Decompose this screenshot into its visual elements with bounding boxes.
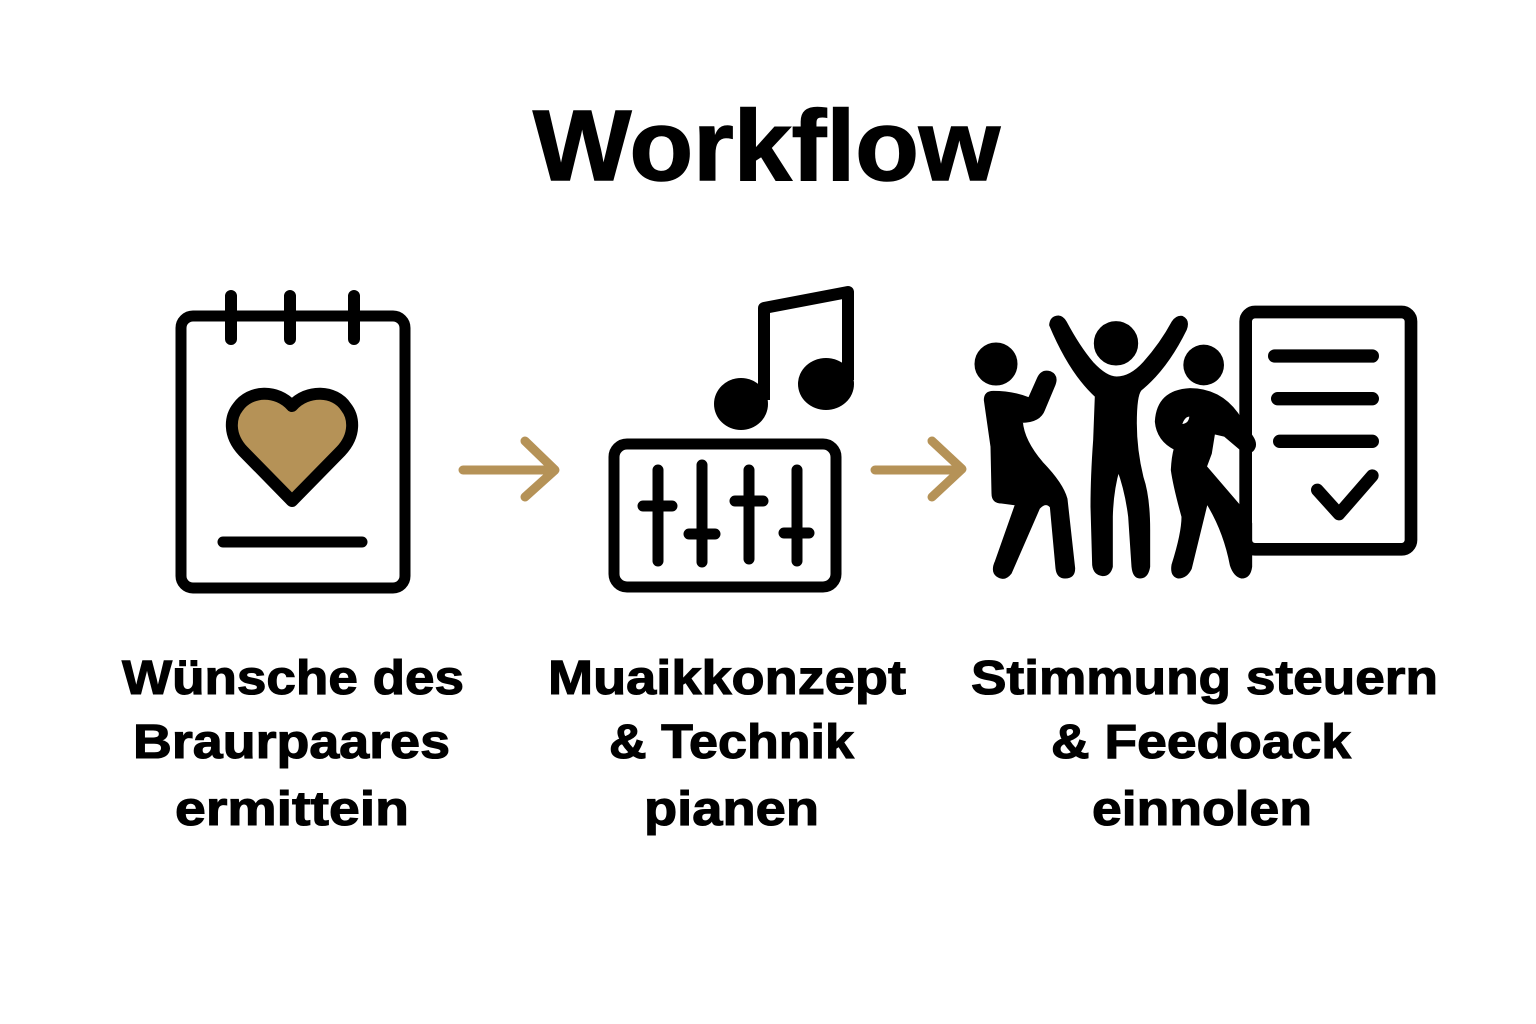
label: step 3 bbox=[971, 652, 1438, 836]
label: step 3: einnolen bbox=[1092, 783, 1312, 836]
icon: music note and mixer bbox=[614, 292, 854, 587]
arrow 1 bbox=[463, 441, 555, 497]
label: step 1: Braurpaares bbox=[133, 716, 450, 769]
icon: person right bbox=[1156, 345, 1254, 577]
icon: dancing people and checklist bbox=[976, 312, 1411, 577]
icon: mixer bbox=[614, 444, 836, 587]
label: step 1: Wünsche des bbox=[122, 652, 464, 705]
icon: music note bbox=[714, 292, 854, 430]
label: step 2: Muaikkonzept bbox=[548, 652, 906, 705]
label: step 1: ermittein bbox=[175, 783, 409, 836]
icon: person middle bbox=[1051, 317, 1186, 577]
label: step 3: Stimmung steuern bbox=[971, 652, 1438, 705]
icon: person left bbox=[976, 344, 1074, 577]
title: Workflow bbox=[533, 90, 1000, 202]
label: step 2: & Technik bbox=[609, 716, 854, 769]
arrow 2 bbox=[875, 441, 962, 497]
icon: notepad with heart bbox=[181, 296, 405, 588]
label: step 2: pianen bbox=[644, 783, 819, 836]
label: step 1 bbox=[122, 652, 464, 836]
icon: checklist bbox=[1246, 312, 1411, 549]
label: step 3: & Feedoack bbox=[1051, 716, 1351, 769]
label: step 2 bbox=[548, 652, 906, 836]
